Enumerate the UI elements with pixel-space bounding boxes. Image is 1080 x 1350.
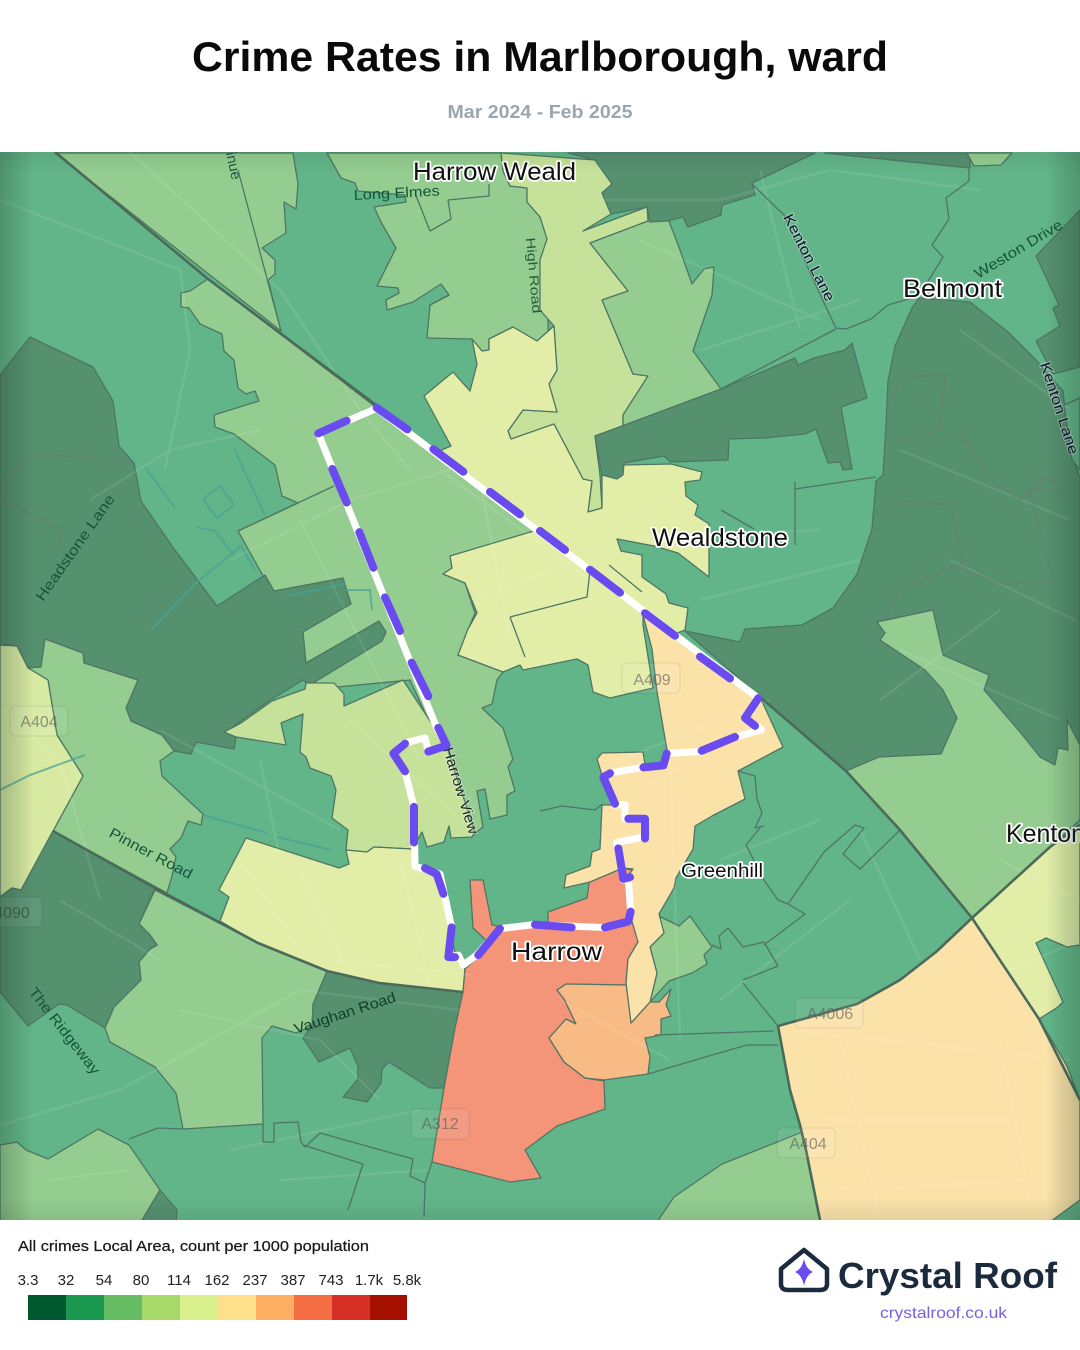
low-contrast traces inside dark areas (0, 374, 1060, 620)
map edge vignette (0, 152, 1080, 1220)
minor road labels: The Ridgeway (25, 985, 103, 1079)
minor road labels: Harrow View (439, 745, 481, 837)
legend scale labels: 162 (204, 1272, 230, 1289)
place name labels: Greenhill (681, 861, 763, 882)
logo: Crystal Roof (781, 1250, 1058, 1322)
minor road labels: Headstone Lane (33, 492, 119, 604)
road number badges (0, 663, 863, 1158)
legend scale labels: 387 (280, 1272, 306, 1289)
legend scale labels: 114 (167, 1272, 191, 1289)
choropleth map (0, 151, 1080, 1222)
minor road labels: Vaughan Road (292, 990, 398, 1038)
map regions (0, 153, 1080, 1222)
road number badges: A4006 (807, 1006, 853, 1023)
area and district boundaries (129, 167, 969, 1217)
legend scale labels: 1.7k (355, 1272, 384, 1289)
legend scale labels: 5.8k (393, 1272, 422, 1289)
icon: house with star (781, 1250, 827, 1290)
place name labels (413, 158, 1080, 966)
legend scale labels (18, 1272, 422, 1289)
minor road labels: Long Elmes (353, 184, 440, 204)
wordmark: Crystal Roof (838, 1255, 1058, 1296)
ward boundary: white line with dashed purple overlay (318, 408, 762, 965)
legend scale labels: 54 (96, 1272, 112, 1289)
heavy rail and main road boundaries (53, 152, 1080, 1220)
legend (18, 1238, 422, 1320)
minor road labels: Weston Drive (972, 217, 1066, 282)
waterways (0, 449, 372, 850)
place name labels: Harrow Weald (413, 158, 576, 186)
road number badges: A312 (421, 1116, 459, 1133)
road number badges: A404 (20, 714, 58, 731)
legend scale labels: 32 (58, 1272, 74, 1289)
place name labels: Harrow (511, 938, 603, 966)
legend scale labels: 237 (242, 1272, 268, 1289)
place name labels: Belmont (903, 275, 1002, 303)
minor road labels (25, 151, 1080, 1079)
legend scale labels: 743 (318, 1272, 344, 1289)
title: Crime Rates in Marlborough, ward (192, 33, 888, 80)
website: crystalroof.co.uk (880, 1305, 1008, 1322)
road number badges: A404 (789, 1136, 827, 1153)
legend scale labels: 80 (133, 1272, 149, 1289)
minor road labels: Pinner Road (106, 825, 195, 883)
place name labels: Wealdstone (652, 524, 788, 552)
minor road labels: inue (222, 151, 244, 181)
road network (0, 152, 1080, 1220)
minor road labels: Kenton Lane (1036, 360, 1080, 457)
road number badges: A409 (633, 672, 671, 689)
subtitle: date range: Mar 2024 - Feb 2025 (448, 102, 632, 122)
minor road labels: High Road (523, 237, 545, 314)
minor road labels: Kenton Lane (779, 212, 837, 304)
legend title: All crimes Local Area, count per 1000 population (18, 1238, 369, 1255)
legend scale labels: 3.3 (18, 1272, 38, 1289)
legend colour bar (28, 1295, 407, 1320)
